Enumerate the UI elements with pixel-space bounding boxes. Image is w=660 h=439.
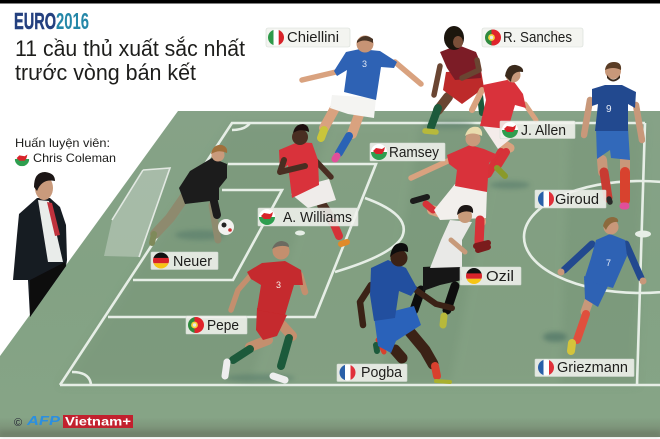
player: A. Williams: [279, 124, 347, 244]
player: Neuer: [152, 145, 234, 243]
label: J. Allen: J. Allen: [521, 122, 566, 139]
player: Griezmann: 7: [606, 258, 611, 268]
player: Chiellini: 3: [362, 59, 367, 69]
title: trước vòng bán kết: [15, 60, 197, 85]
title: [15, 36, 246, 85]
player: Giroud: 9: [606, 104, 612, 115]
coach caption: Chris Coleman: [33, 151, 116, 165]
player: Pepe: [225, 241, 305, 380]
player: Chiellini: [302, 36, 421, 159]
player: Ozil: [414, 205, 488, 325]
label: Ramsey: [370, 143, 445, 161]
label: Chiellini: Chiellini: [287, 29, 339, 46]
top black bar: [0, 0, 660, 4]
label: Giroud: [535, 190, 606, 208]
label: A. Williams: A. Williams: [283, 209, 352, 226]
coach caption: [15, 136, 116, 166]
label: Neuer: Neuer: [173, 253, 212, 270]
player: Griezmann: [558, 217, 646, 351]
credit: AFP Vietnam+: ©: [14, 417, 22, 429]
pitch lines: [60, 123, 660, 385]
coach caption: Huấn luyện viên:: [15, 136, 110, 150]
label: Pogba: Pogba: [361, 364, 403, 381]
label: Pogba: [337, 364, 407, 382]
player: Giroud: [584, 62, 642, 206]
label: Pepe: Pepe: [207, 317, 239, 334]
player: R. Sanches: [425, 26, 484, 132]
player: J. Allen: [472, 65, 536, 176]
label: Giroud: Giroud: [555, 191, 599, 208]
credit: AFP Vietnam+: [14, 413, 133, 429]
label: J. Allen: [500, 121, 575, 139]
logo: EURO 2016: EURO: [14, 8, 56, 34]
player: Pogba: [360, 243, 452, 382]
label: Pepe: [186, 316, 247, 334]
coach: Chris Coleman: [13, 172, 67, 317]
player: Pepe: 3: [276, 280, 281, 290]
label: Neuer: [151, 252, 218, 270]
title: 11 cầu thủ xuất sắc nhất: [15, 36, 246, 61]
credit: AFP Vietnam+: Vietnam+: [65, 416, 131, 428]
logo: EURO 2016: 2016: [56, 8, 89, 34]
credit: AFP Vietnam+: AFP: [26, 413, 60, 428]
label: R. Sanches: R. Sanches: [503, 29, 572, 46]
label: Ozil: [460, 267, 521, 285]
label: Ozil: Ozil: [486, 268, 514, 285]
label: Chiellini: [266, 28, 350, 47]
label: Ramsey: Ramsey: [389, 144, 439, 161]
label: Griezmann: Griezmann: [557, 359, 628, 376]
goal: [104, 168, 170, 257]
label: R. Sanches: [482, 28, 583, 47]
player: Ramsey: [411, 127, 498, 250]
football pitch: [0, 111, 660, 437]
